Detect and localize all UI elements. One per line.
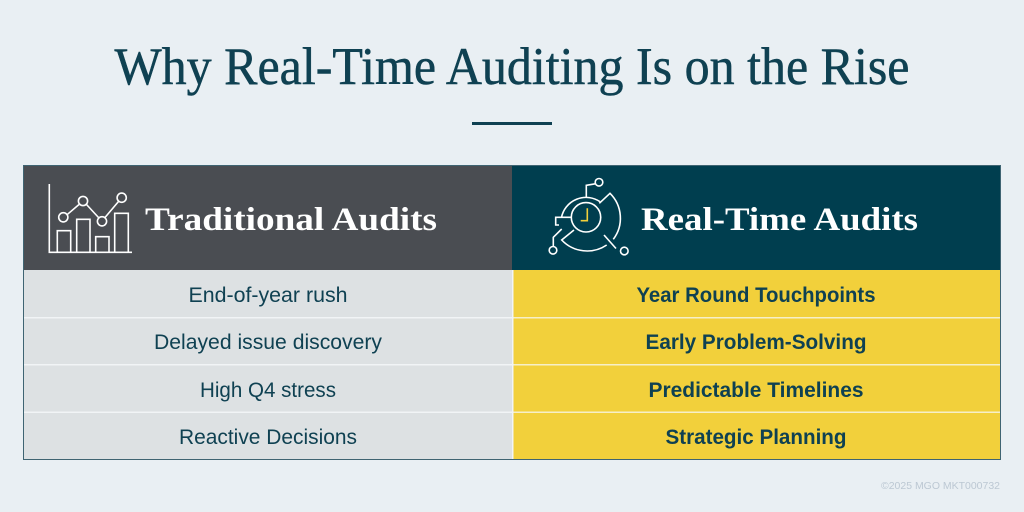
copyright note: ©2025 MGO MKT000732 <box>881 480 1000 492</box>
panel: traditional audits header <box>24 166 512 270</box>
panel: traditional audits rows <box>24 270 512 459</box>
icon: clock with circuit nodes <box>549 178 628 255</box>
row text: high q4 stress: High Q4 stress <box>200 379 336 402</box>
panel: real-time audits rows <box>513 270 1000 459</box>
panel: real-time audits header <box>512 166 1000 270</box>
row text: reactive decisions: Reactive Decisions <box>179 426 357 449</box>
row text: early problem-solving: Early Problem-Solving <box>646 331 866 354</box>
row text: year round touchpoints: Year Round Touchpoints <box>636 284 876 307</box>
row text: end-of-year rush: End-of-year rush <box>188 284 348 307</box>
row text: strategic planning: Strategic Planning <box>666 426 846 449</box>
row text: delayed issue discovery: Delayed issue discovery <box>154 331 383 354</box>
icon: bar and line chart <box>49 184 132 252</box>
heading: traditional audits: Traditional Audits <box>145 202 437 238</box>
comparison table <box>23 165 1001 460</box>
row text: predictable timelines: Predictable Timelines <box>648 379 864 402</box>
heading: real-time audits: Real-Time Audits <box>641 202 918 238</box>
title underline <box>472 122 552 125</box>
title: Why Real-Time Auditing Is on the Rise <box>114 38 910 96</box>
